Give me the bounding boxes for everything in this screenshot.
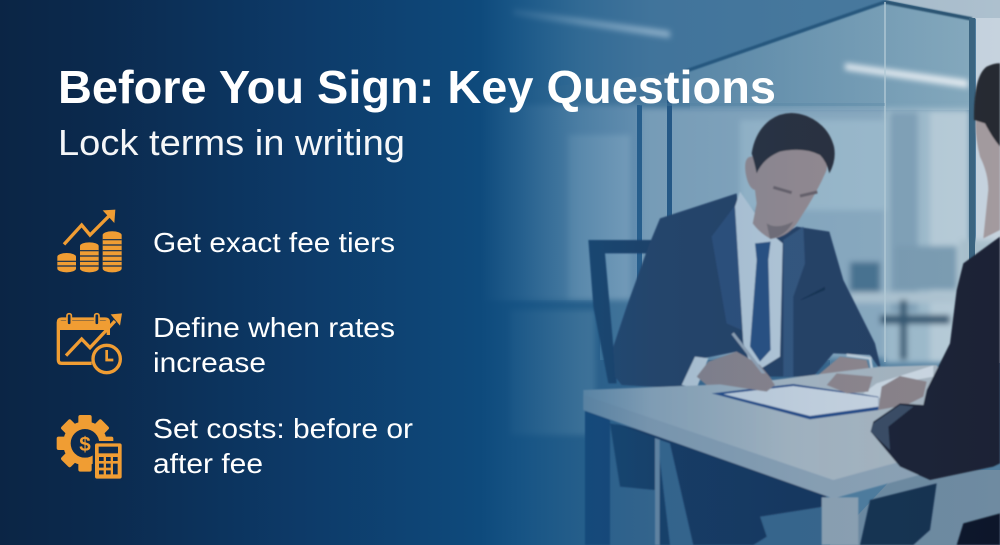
man: cuffs and hands xyxy=(682,357,708,388)
second sheet xyxy=(863,365,933,398)
icon: calendar with chart and clock xyxy=(58,313,122,373)
man: neck and face xyxy=(745,140,828,239)
photo: man signing document and client xyxy=(583,63,1000,545)
man: writing hand over document xyxy=(713,373,775,392)
title: Before You Sign: Key Questions xyxy=(58,61,776,113)
client hair xyxy=(974,63,1000,147)
chair xyxy=(588,240,670,545)
label: Get exact fee tiers xyxy=(153,227,395,258)
label: Define when rates xyxy=(153,312,395,343)
item 3: costs xyxy=(57,413,413,481)
label line 2: after fee xyxy=(153,448,263,479)
background photo: blurred office details xyxy=(480,9,996,435)
label: Set costs: before or xyxy=(153,413,413,444)
table right leg xyxy=(822,497,858,545)
background photo: office base xyxy=(380,0,1000,545)
client jacket xyxy=(871,237,1000,480)
table left leg xyxy=(585,407,610,545)
item 1: fee tiers xyxy=(57,210,395,272)
pen xyxy=(733,333,776,389)
client hands xyxy=(878,376,927,410)
shirt xyxy=(735,192,783,373)
table xyxy=(583,365,992,498)
client neck and face xyxy=(976,110,1000,238)
document folder xyxy=(712,384,878,419)
table front edge xyxy=(583,395,992,498)
label line 2: increase xyxy=(153,347,266,378)
man lower body xyxy=(613,423,833,545)
icon: rising coins xyxy=(57,210,122,272)
subtitle: Lock terms in writing xyxy=(58,122,405,163)
tie xyxy=(750,242,771,362)
man: suit jacket xyxy=(613,193,882,388)
glass wall frame xyxy=(637,2,975,363)
man: hair xyxy=(752,113,835,173)
icon: gear with dollar and calculator xyxy=(57,415,124,481)
item 2: rate increases xyxy=(58,312,395,378)
icon: gear with dollar and calculator: $ xyxy=(79,433,91,456)
client lower body xyxy=(957,513,1000,545)
